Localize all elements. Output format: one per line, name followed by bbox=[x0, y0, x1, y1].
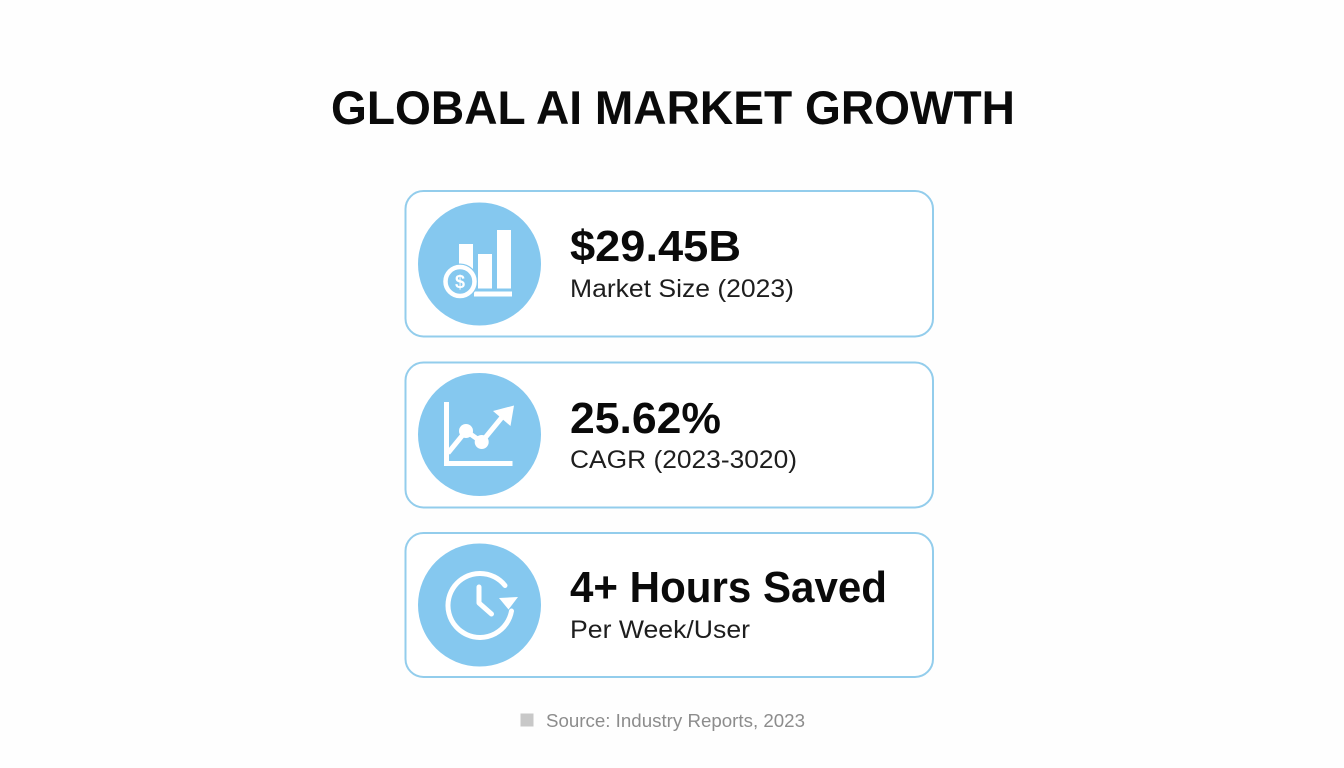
icon: bar chart with dollar coin bbox=[418, 202, 541, 326]
icon: bar chart with dollar coin: $ bbox=[455, 272, 465, 292]
panel: market size bbox=[406, 191, 933, 336]
panel: hours saved bbox=[406, 533, 933, 677]
metric: CAGR value: 25.62% bbox=[570, 394, 721, 443]
label: market size: Market Size (2023) bbox=[570, 275, 794, 303]
label: CAGR: CAGR (2023-3020) bbox=[570, 446, 797, 474]
metric: market size value: $29.45B bbox=[570, 222, 741, 271]
icon: clock with circular arrow bbox=[418, 544, 541, 666]
metric: hours saved value: 4+ Hours Saved bbox=[570, 563, 887, 612]
panel: CAGR bbox=[406, 362, 933, 508]
title: GLOBAL AI MARKET GROWTH bbox=[331, 82, 1015, 135]
label: per week per user: Per Week/User bbox=[570, 616, 750, 644]
icon: line chart with arrow bbox=[418, 373, 541, 496]
source note: Source: Industry Reports, 2023 bbox=[546, 711, 805, 731]
